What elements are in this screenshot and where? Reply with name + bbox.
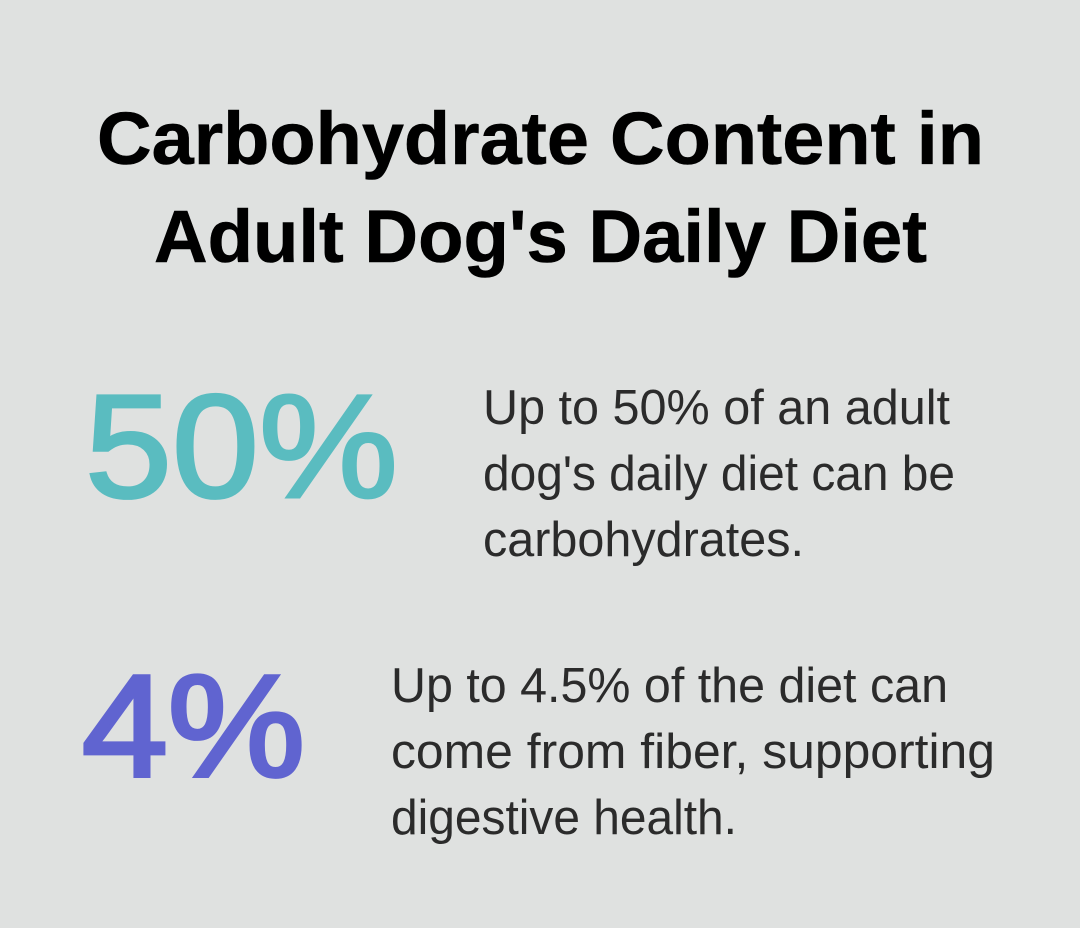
description: 50%: Up to 50% of an adult [483, 381, 950, 435]
stat: 50%: 50% [85, 365, 398, 529]
description: 4%: Up to 4.5% of the diet can [391, 659, 948, 713]
stat: 4%: 4% [82, 645, 305, 807]
description: 4% [391, 659, 995, 845]
description: 50%: dog's daily diet can be [483, 447, 955, 501]
description: 50%: carbohydrates. [483, 513, 804, 567]
title: Adult Dog's Daily Diet [154, 195, 927, 278]
title: Carbohydrate Content in [97, 97, 984, 180]
description: 4%: digestive health. [391, 791, 737, 845]
description: 4%: come from fiber, supporting [391, 725, 995, 779]
description: 50% [483, 381, 955, 567]
title [97, 97, 984, 278]
